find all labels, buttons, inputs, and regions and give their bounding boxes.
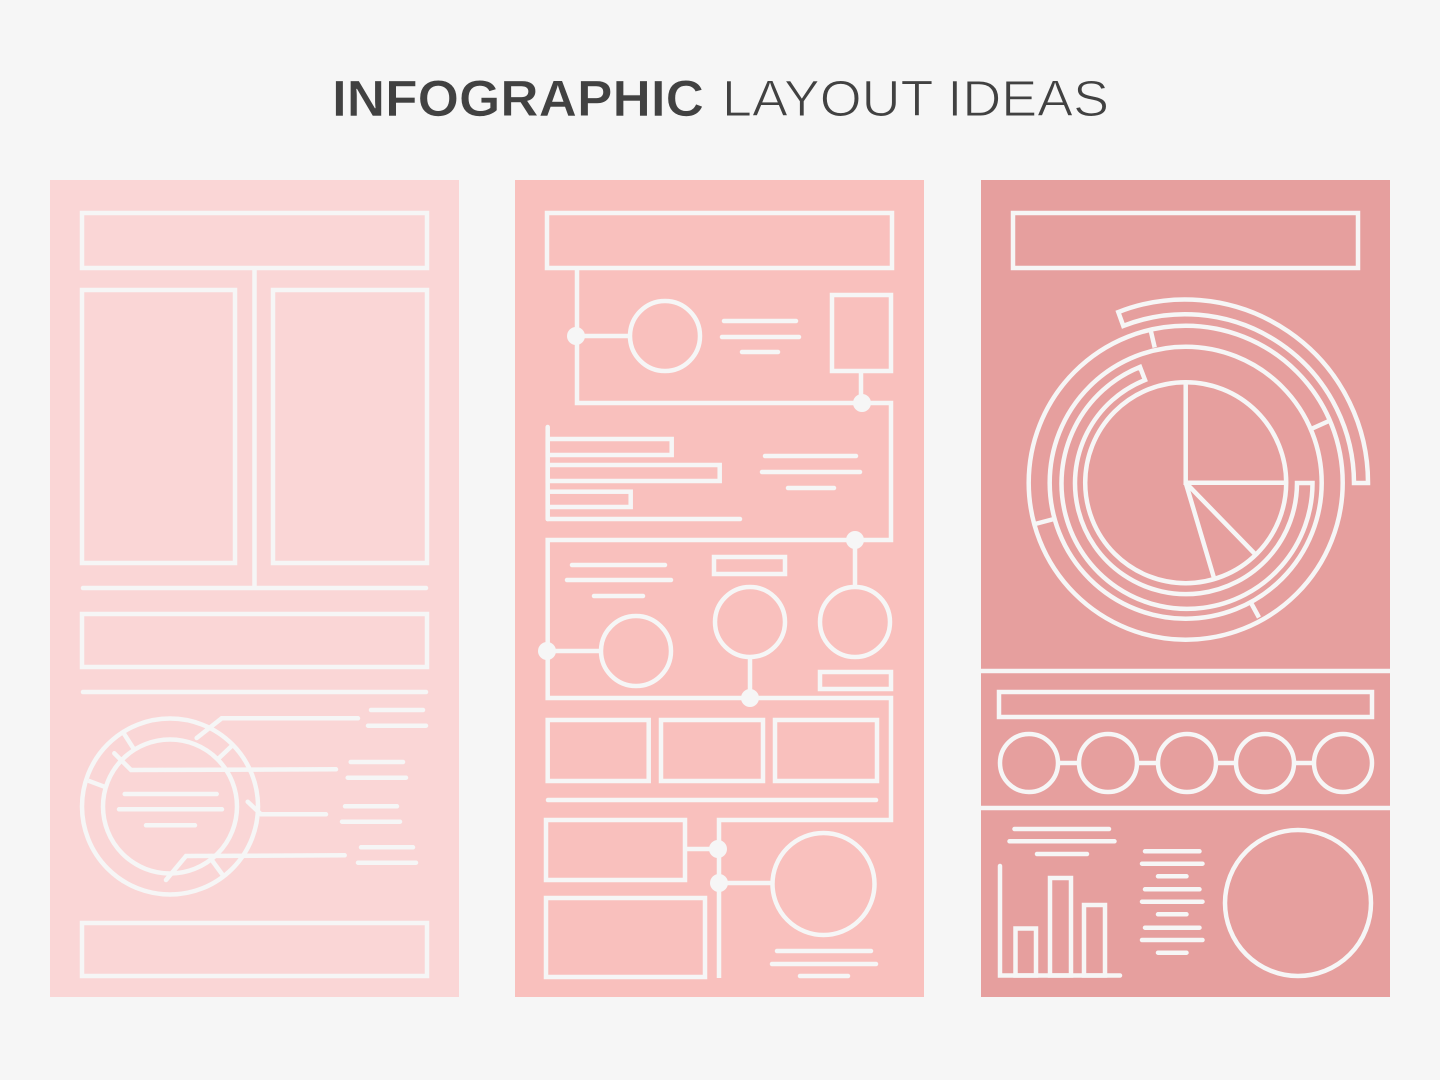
ring center text lines — [119, 794, 222, 825]
three box row — [548, 720, 877, 781]
right middle circle — [820, 587, 890, 657]
pie chart — [1085, 382, 1286, 583]
panel: layout one — [50, 180, 459, 997]
flow branches — [547, 336, 861, 883]
top text lines — [722, 321, 799, 352]
bottom text lines — [772, 951, 876, 976]
title — [332, 70, 1109, 127]
large circle — [772, 833, 874, 935]
header box — [82, 213, 427, 268]
center divider — [252, 268, 257, 587]
middle banner box — [82, 614, 427, 667]
banner box — [999, 692, 1372, 717]
bar chart text lines — [762, 456, 860, 488]
top circle — [630, 301, 700, 371]
flow connector — [548, 268, 891, 978]
middle text lines — [567, 565, 671, 596]
header box — [547, 213, 892, 268]
center middle circle — [715, 587, 785, 657]
callout text lines — [342, 710, 426, 863]
circle chain — [1000, 734, 1372, 792]
small label box top — [714, 557, 785, 574]
divider line — [981, 669, 1390, 673]
inner arc band — [1062, 367, 1313, 609]
panel: layout two — [515, 180, 924, 997]
text lines above chart — [1010, 829, 1114, 854]
center text lines — [1142, 851, 1202, 953]
panel: layout three — [981, 180, 1390, 997]
second divider line — [83, 690, 426, 694]
callout leader lines — [114, 718, 358, 880]
second divider line — [981, 806, 1390, 810]
title: LAYOUT IDEAS — [722, 70, 1109, 127]
radial chart — [1029, 300, 1368, 640]
top right box — [832, 295, 891, 371]
small label box bottom — [820, 672, 891, 689]
left column box — [82, 290, 235, 563]
footer box — [82, 923, 427, 976]
flow nodes — [538, 327, 871, 892]
divider line — [83, 586, 426, 590]
divider line — [548, 798, 876, 802]
lower box two — [546, 898, 705, 977]
header box — [1013, 213, 1358, 268]
left middle circle — [601, 616, 671, 686]
large circle — [1225, 830, 1371, 976]
segmented ring — [1029, 326, 1343, 640]
lower box one — [546, 820, 685, 880]
title: INFOGRAPHIC — [332, 70, 704, 127]
right column box — [273, 290, 427, 563]
outer arc band — [1118, 300, 1368, 483]
segmented ring chart — [82, 718, 258, 894]
horizontal bar chart — [548, 427, 740, 519]
column bar chart — [1000, 866, 1120, 976]
